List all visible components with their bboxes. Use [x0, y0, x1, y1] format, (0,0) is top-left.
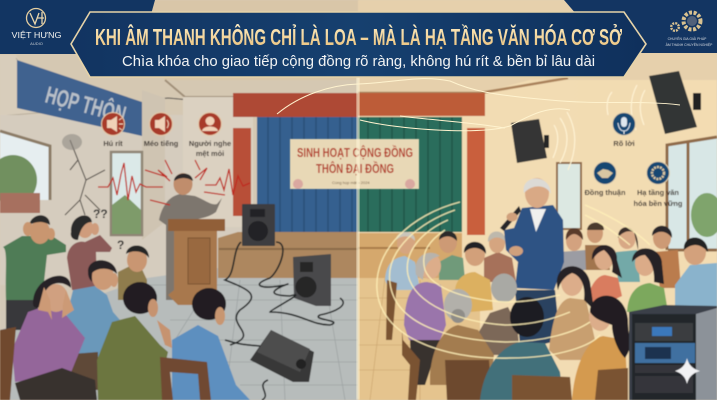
back row woman grey: [559, 228, 588, 270]
sign board: [290, 139, 419, 189]
left window: [0, 131, 50, 213]
back woman grey bun: [430, 289, 494, 400]
red noise waves: [98, 160, 250, 205]
big wall speaker: [649, 71, 701, 134]
podium: [168, 219, 225, 305]
blue banner: HỌP THÔN: [42, 81, 129, 129]
icon: consensus: Đồng thuận: [584, 188, 626, 197]
panel: solution scene: [358, 0, 717, 400]
floor monitor: [250, 330, 314, 382]
woman purple: [404, 253, 446, 385]
stage: [218, 232, 359, 278]
header corner right: [564, 0, 717, 53]
small window: [557, 163, 581, 229]
icon: distorted sound: Méo tiếng: [144, 139, 179, 148]
woman coral: [588, 245, 622, 310]
man yellow shirt: [455, 242, 493, 312]
chairs: [386, 280, 420, 400]
title banner: [71, 12, 646, 77]
seated man blue shirt: [57, 260, 120, 390]
back row woman teal: [616, 227, 640, 282]
stage backdrop: [233, 93, 359, 233]
logo: Việt Hưng Audio: AUDIO: [30, 41, 43, 46]
seated man tan shirt: [118, 245, 149, 300]
red band: [358, 93, 485, 116]
standing man green: [3, 215, 66, 330]
woman green: [627, 248, 668, 312]
old woman pink: [484, 232, 516, 282]
icon: cultural infrastructure: Hạ tầng văn: [637, 188, 679, 197]
green curtain: [358, 117, 462, 232]
old man glasses: [385, 232, 420, 296]
logo: Việt Hưng Audio: [12, 8, 62, 46]
question marks: [93, 207, 124, 252]
floor: [0, 268, 359, 400]
speaker at podium: [159, 173, 222, 300]
center window: [111, 152, 142, 235]
man light blue right: [675, 237, 717, 308]
amplifier rack: [629, 305, 717, 400]
icon: clear speech: Rõ lời: [613, 139, 635, 148]
logo: gears and tagline: ÂM THANH CHUYÊN NGHIỆP: [666, 42, 713, 47]
wall crack: [65, 140, 105, 215]
ceiling: [150, 0, 359, 80]
big window: [667, 137, 717, 250]
question marks: ??: [93, 207, 108, 221]
header corner left: [0, 0, 155, 54]
small wall speaker: [511, 119, 549, 163]
icon row: problems: [102, 112, 231, 158]
center glowing divider: [277, 76, 680, 400]
icon: tired listener: mệt mỏi: [196, 149, 224, 158]
icon row: benefits: [584, 112, 683, 208]
seated woman purple: [0, 276, 97, 400]
back man grey hair: [477, 274, 520, 355]
speaker sound arcs: [553, 85, 645, 170]
seated man blue from behind: [160, 288, 250, 400]
blue banner: [17, 60, 142, 136]
seated woman tan shirt: [549, 266, 595, 360]
back man teal shirt: [480, 297, 572, 400]
icon: cultural infrastructure: hóa bền vững: [634, 199, 683, 208]
stage: [358, 233, 462, 278]
logo: gears and tagline: [666, 12, 713, 47]
subtitle: Chìa khóa cho giao tiếp cộng đồng rõ ràng, không hú rít & bền bỉ lâu dài: [122, 53, 595, 70]
floor speaker: [293, 254, 331, 306]
stage speaker: [242, 204, 275, 246]
sign board: SINH HOẠT CỘNG ĐỒNG: [297, 145, 413, 160]
cables: [225, 242, 343, 400]
back row man: [585, 222, 610, 270]
seated man olive from behind: [97, 282, 172, 400]
sign board: THÔN ĐẠI ĐỒNG: [316, 161, 394, 176]
icon: cultural infrastructure: [634, 162, 683, 208]
icon: tired listener: Người nghe: [189, 139, 231, 148]
sound waves: [377, 202, 650, 358]
seated woman orange: [572, 296, 630, 400]
wall column: [0, 115, 250, 285]
floor: [358, 278, 480, 400]
panel: problem scene: [0, 0, 359, 400]
icon: howling: Hú rít: [103, 139, 123, 148]
man green shirt: [439, 231, 465, 280]
icon: tired listener: [189, 112, 231, 158]
back row man orange: [652, 226, 681, 288]
presenter in suit: [500, 178, 564, 345]
logo: Việt Hưng Audio: VIỆT HƯNG: [12, 31, 62, 40]
standing woman maroon: [67, 215, 112, 290]
logo: gears and tagline: CHUYÊN GIA GIẢI PHÁP: [668, 36, 707, 41]
question marks: ?: [117, 238, 124, 252]
sign board: Cùng họp mặt • 2024: [332, 180, 370, 185]
